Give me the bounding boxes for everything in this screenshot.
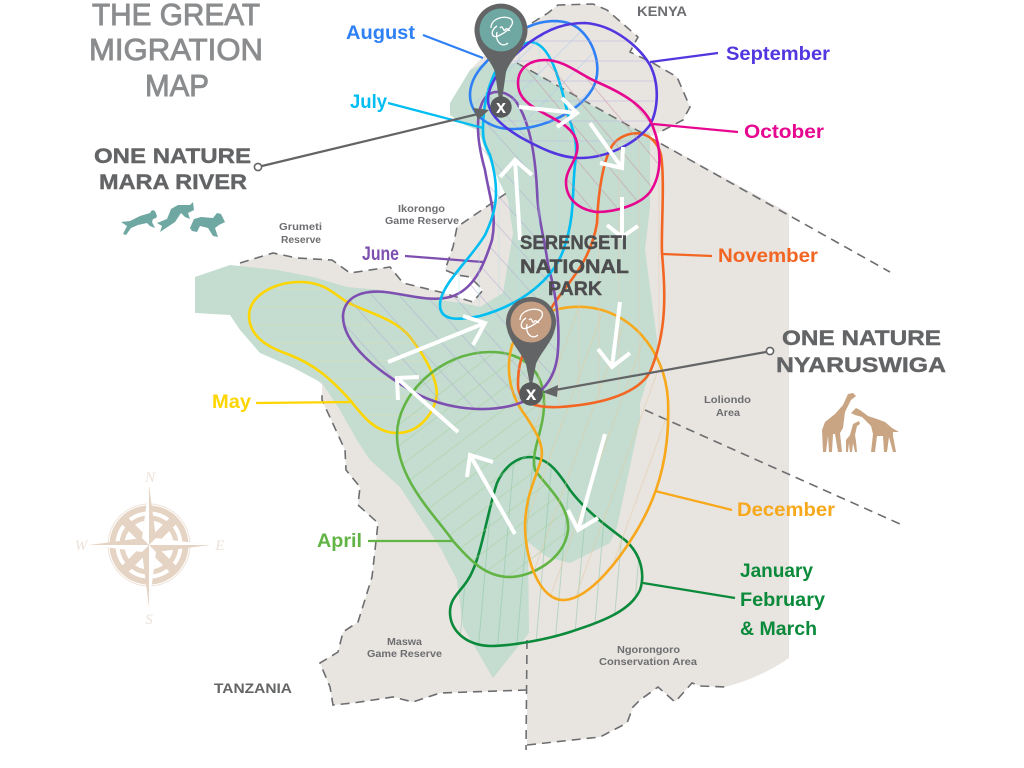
land area: greater Serengeti region	[240, 4, 789, 745]
month: November	[518, 133, 819, 407]
month: June	[343, 92, 558, 409]
callout: One Nature Nyaruswiga	[542, 327, 946, 397]
park name label: SERENGETI	[520, 233, 627, 254]
park name label: PARK	[548, 279, 602, 300]
area label: Maswa Game Reserve: Game Reserve	[367, 649, 442, 660]
eastern border	[645, 410, 900, 524]
month: August	[346, 21, 597, 129]
month: November: November	[718, 246, 819, 267]
location pin: Nyaruswiga	[506, 297, 556, 406]
title: MIGRATION	[89, 32, 263, 67]
area label: Ikorongo Game Reserve: Game Reserve	[385, 216, 459, 227]
area label: Grumeti Reserve: Grumeti	[279, 222, 322, 233]
month: July: July	[350, 92, 387, 113]
area label: Loliondo Area: Area	[716, 408, 740, 419]
area label: Ikorongo Game Reserve: Ikorongo	[398, 204, 445, 215]
month: July	[350, 42, 576, 319]
area label: Maswa Game Reserve	[367, 637, 442, 660]
area label: Ngorongoro Conservation Area: Conservation Area	[599, 657, 697, 668]
icon: wildebeest	[121, 202, 225, 237]
icon: compass rose: S	[145, 612, 153, 628]
icon: compass rose: E	[214, 538, 225, 554]
area label: Loliondo Area: Loliondo	[704, 395, 751, 406]
area label: Grumeti Reserve: Reserve	[281, 235, 321, 246]
month: April: April	[317, 531, 362, 552]
area label: Ngorongoro Conservation Area	[599, 645, 697, 668]
southern border	[526, 640, 527, 750]
park name label: NATIONAL	[520, 257, 629, 278]
area label: Maswa Game Reserve: Maswa	[387, 637, 422, 648]
callout: One Nature Mara River: ONE NATURE	[94, 145, 251, 168]
icon: compass rose: W	[75, 538, 89, 554]
park name label	[520, 233, 629, 300]
month: October: October	[744, 122, 825, 143]
white migration direction arrows	[388, 98, 638, 534]
location pin: Mara River	[474, 4, 528, 118]
month: September	[488, 23, 831, 158]
national park green area	[195, 63, 658, 678]
area label: Ikorongo Game Reserve	[385, 204, 459, 227]
area label: Grumeti Reserve	[279, 222, 322, 246]
area label: Tanzania: TANZANIA	[214, 681, 292, 696]
month: December	[509, 307, 836, 600]
title	[89, 0, 263, 103]
month: January February March: & March	[740, 619, 817, 640]
location pin: Nyaruswiga: x	[526, 384, 537, 405]
month: August: August	[346, 23, 416, 44]
location pin: Mara River: x	[496, 97, 506, 117]
area label: Loliondo Area	[704, 395, 751, 419]
dashed boundary of the land area	[240, 4, 725, 745]
month: May: May	[212, 392, 251, 413]
icon: giraffes	[822, 393, 899, 452]
icon: compass rose	[75, 470, 225, 628]
month: January February March	[450, 457, 825, 646]
title: MAP	[145, 68, 209, 103]
area label: Kenya: KENYA	[637, 4, 687, 19]
month: January February March: January	[740, 561, 813, 582]
callout: One Nature Mara River	[94, 108, 489, 194]
month: September: September	[726, 44, 831, 65]
month: December: December	[737, 500, 836, 521]
callout: One Nature Nyaruswiga: ONE NATURE	[782, 327, 941, 350]
area label: Ngorongoro Conservation Area: Ngorongoro	[617, 645, 680, 656]
month: June: June	[362, 244, 399, 265]
callout: One Nature Nyaruswiga: NYARUSWIGA	[776, 354, 946, 377]
month: May	[212, 282, 437, 433]
month: January February March: February	[740, 590, 825, 611]
Kenya Tanzania border	[517, 63, 890, 272]
icon: compass rose: N	[144, 470, 156, 486]
month: October	[518, 60, 825, 212]
callout: One Nature Mara River: MARA RIVER	[99, 171, 247, 194]
month: April	[317, 352, 568, 577]
